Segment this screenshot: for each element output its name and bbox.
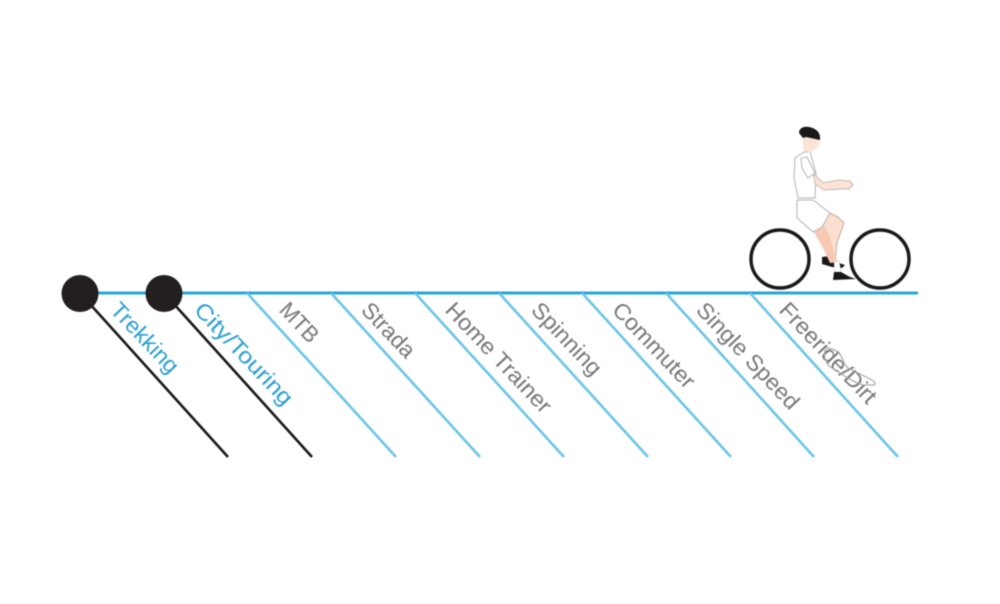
branch: Single Speed: [666, 293, 814, 457]
branch: Home Trainer: [415, 293, 564, 457]
branch: MTB: MTB: [274, 297, 324, 348]
helmet: [799, 127, 820, 140]
branch: Commuter: Commuter: [607, 297, 701, 394]
branch: Strada: Strada: [356, 297, 421, 363]
branch: Strada: [331, 293, 480, 457]
front wheel: [851, 230, 909, 288]
arm: [813, 173, 853, 190]
branch: Freeride/Dirt: [750, 293, 898, 457]
far leg and foot: [822, 213, 844, 262]
sock: [834, 261, 841, 272]
branch: Spinning: Spinning: [526, 297, 607, 380]
branch: MTB: [247, 293, 396, 457]
neck and face: [803, 137, 820, 153]
branch: Home Trainer: Home Trainer: [440, 297, 557, 419]
main horizontal timeline: [80, 292, 918, 294]
branch: Freeride/Dirt: Freeride/Dirt: [774, 297, 883, 409]
near leg: [814, 226, 838, 263]
branch: Trekking: Trekking: [105, 297, 184, 378]
branch: Commuter: [582, 293, 731, 457]
shorts: [797, 200, 830, 232]
sleeve: [801, 157, 815, 178]
branch: Spinning: [499, 293, 648, 457]
icon: cyclist on bicycle: [751, 127, 909, 288]
branch: City/Touring: City/Touring: [189, 297, 298, 410]
near foot: [833, 272, 856, 280]
rear wheel: [751, 230, 809, 288]
torso: [794, 152, 816, 198]
branch: Trekking: [62, 275, 228, 457]
branch: Single Speed: Single Speed: [691, 297, 805, 415]
branch: City/Touring: [146, 275, 312, 457]
